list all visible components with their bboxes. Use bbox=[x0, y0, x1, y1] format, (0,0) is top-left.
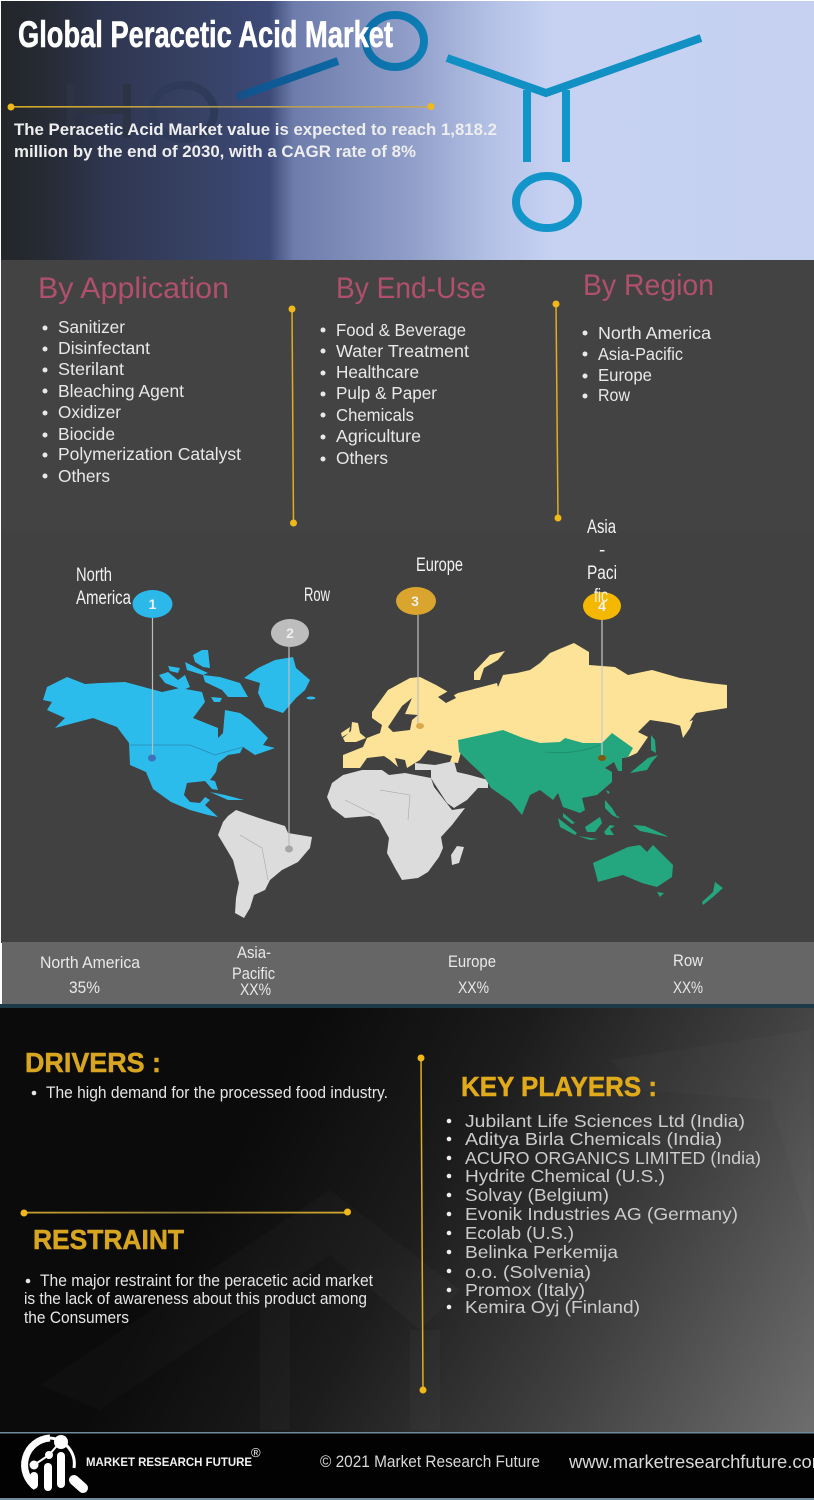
panel: market segments bbox=[1, 260, 814, 533]
icon: peracetic acid molecule bbox=[71, 15, 701, 228]
list: applications: Biocide bbox=[58, 424, 115, 444]
map label: asia-pacific bbox=[587, 517, 617, 607]
list: applications: Bleaching Agent bbox=[58, 381, 184, 401]
list: end uses: Agriculture bbox=[336, 426, 421, 446]
divider: first vertical gold line bbox=[288, 306, 297, 526]
map marker 4: asia-pacific bbox=[583, 592, 621, 761]
stat: asia-pacific: XX% bbox=[240, 981, 271, 999]
panel: header banner bbox=[1, 1, 814, 260]
panel: by region bbox=[582, 269, 714, 405]
map label: asia-pacific: - bbox=[599, 540, 605, 561]
map label: asia-pacific: Asia bbox=[587, 517, 616, 538]
map marker 4: asia-pacific: 4 bbox=[598, 598, 606, 614]
list: key players: Belinka Perkemija bbox=[465, 1242, 618, 1262]
text: restraint description: the Consumers bbox=[24, 1309, 129, 1327]
panel: drivers bbox=[25, 1047, 388, 1102]
stat: north america: North America bbox=[40, 954, 141, 972]
list: regions: Row bbox=[598, 385, 630, 405]
list: end uses: Water Treatment bbox=[336, 341, 469, 361]
list: applications: Polymerization Catalyst bbox=[58, 444, 241, 464]
stat: row: Row bbox=[673, 952, 703, 970]
map label: north america bbox=[76, 565, 131, 609]
title: Global Peracetic Acid Market bbox=[18, 14, 393, 55]
list: applications: Sterilant bbox=[58, 359, 124, 379]
registered mark: ® bbox=[251, 1445, 261, 1460]
list: key players: Kemira Oyj (Finland) bbox=[465, 1297, 640, 1317]
summary text bbox=[14, 120, 497, 161]
map label: asia-pacific: fic bbox=[594, 586, 608, 607]
map marker 1: north america: 1 bbox=[149, 596, 157, 612]
list: applications: Others bbox=[58, 466, 110, 486]
text: driver item: The high demand for the processed food industry. bbox=[46, 1084, 388, 1102]
map: north america bbox=[43, 650, 316, 817]
list: applications: Disinfectant bbox=[58, 338, 150, 358]
heading: restraint: RESTRAINT bbox=[33, 1224, 184, 1255]
stat: north america: 35% bbox=[69, 979, 100, 997]
list: key players: Hydrite Chemical (U.S.) bbox=[465, 1166, 665, 1186]
heading: by end-use: By End-Use bbox=[336, 272, 486, 305]
map label: north america: North bbox=[76, 565, 112, 586]
panel: by application bbox=[38, 272, 241, 486]
text: restraint description: The major restraint for the peracetic acid market bbox=[40, 1272, 373, 1290]
map marker 3: europe bbox=[396, 587, 436, 729]
summary text: million by the end of 2030, with a CAGR rate of 8% bbox=[14, 142, 416, 161]
divider: horizontal gold line bbox=[20, 1208, 351, 1216]
divider line with end dots bbox=[8, 103, 434, 110]
panel: restraint bbox=[24, 1224, 373, 1327]
map: inland seas bbox=[388, 690, 456, 732]
list: applications: Oxidizer bbox=[58, 402, 121, 422]
copyright: © 2021 Market Research Future bbox=[320, 1453, 540, 1471]
heading: drivers: DRIVERS : bbox=[25, 1047, 161, 1078]
list: regions: Asia-Pacific bbox=[598, 344, 683, 364]
stat: row: XX% bbox=[673, 979, 703, 997]
panel: drivers, restraint and key players bbox=[0, 1004, 814, 1432]
list: key players: o.o. (Solvenia) bbox=[465, 1262, 591, 1282]
panel: key players bbox=[447, 1071, 761, 1317]
stat: asia-pacific: Asia- bbox=[237, 944, 271, 962]
map label: europe: Europe bbox=[416, 555, 463, 576]
list: regions bbox=[582, 323, 711, 405]
divider: second vertical gold line bbox=[552, 300, 562, 522]
text: restraint description: is the lack of awareness about this product among bbox=[24, 1290, 367, 1308]
list: key players: Jubilant Life Sciences Ltd (India) bbox=[465, 1111, 745, 1131]
list: end uses: Pulp & Paper bbox=[336, 383, 437, 403]
map: south america, africa and middle east bbox=[218, 761, 488, 918]
stat: asia-pacific bbox=[232, 944, 275, 999]
list: end uses: Healthcare bbox=[336, 362, 419, 382]
summary text: The Peracetic Acid Market value is expected to reach 1,818.2 bbox=[14, 120, 497, 139]
list: key players: Promox (Italy) bbox=[465, 1280, 585, 1300]
map label: row: Row bbox=[304, 585, 330, 606]
heading: by application: By Application bbox=[38, 272, 229, 305]
list: key players: Evonik Industries AG (Germany) bbox=[465, 1204, 738, 1224]
panel: footer bbox=[0, 1432, 814, 1500]
heading: by region: By Region bbox=[583, 269, 714, 302]
background arrow watermark bbox=[40, 1030, 812, 1430]
list: key players: Aditya Birla Chemicals (India) bbox=[465, 1129, 722, 1149]
list: key players: ACURO ORGANICS LIMITED (India) bbox=[465, 1148, 761, 1168]
map marker 2: row bbox=[271, 619, 309, 852]
panel: world map bbox=[1, 517, 814, 943]
stat: north america bbox=[40, 954, 141, 997]
stat: row bbox=[673, 952, 703, 997]
list: regions: Europe bbox=[598, 365, 652, 385]
map: europe and russia bbox=[341, 643, 727, 768]
map marker 1: north america bbox=[132, 590, 172, 762]
panel: by end-use bbox=[320, 272, 486, 468]
stat: europe: Europe bbox=[448, 953, 496, 971]
text: restraint description bbox=[24, 1272, 373, 1327]
stat: asia-pacific: Pacific bbox=[232, 965, 275, 983]
list: key players bbox=[447, 1111, 761, 1317]
list: regions: North America bbox=[598, 323, 711, 343]
panel: regional share band bbox=[2, 942, 814, 1004]
list: applications: Sanitizer bbox=[58, 317, 125, 337]
map marker 3: europe: 3 bbox=[411, 593, 419, 609]
divider: vertical gold line bbox=[418, 1054, 426, 1394]
map: asia-pacific bbox=[458, 730, 723, 905]
list: end uses bbox=[320, 320, 469, 468]
list: end uses: Food & Beverage bbox=[336, 320, 466, 340]
map label: north america: America bbox=[76, 588, 131, 609]
map marker 2: row: 2 bbox=[286, 625, 294, 641]
list: end uses: Others bbox=[336, 448, 388, 468]
stat: europe: XX% bbox=[458, 979, 489, 997]
map label: asia-pacific: Paci bbox=[587, 563, 617, 584]
icon: market research future logo bbox=[25, 1435, 83, 1491]
logo wordmark: MARKET RESEARCH FUTURE bbox=[86, 1457, 252, 1469]
list: key players: Solvay (Belgium) bbox=[465, 1185, 609, 1205]
list: end uses: Chemicals bbox=[336, 405, 414, 425]
heading: key players: KEY PLAYERS : bbox=[461, 1071, 657, 1102]
list: key players: Ecolab (U.S.) bbox=[465, 1223, 574, 1243]
stat: europe bbox=[448, 953, 496, 997]
list: applications bbox=[42, 317, 241, 486]
